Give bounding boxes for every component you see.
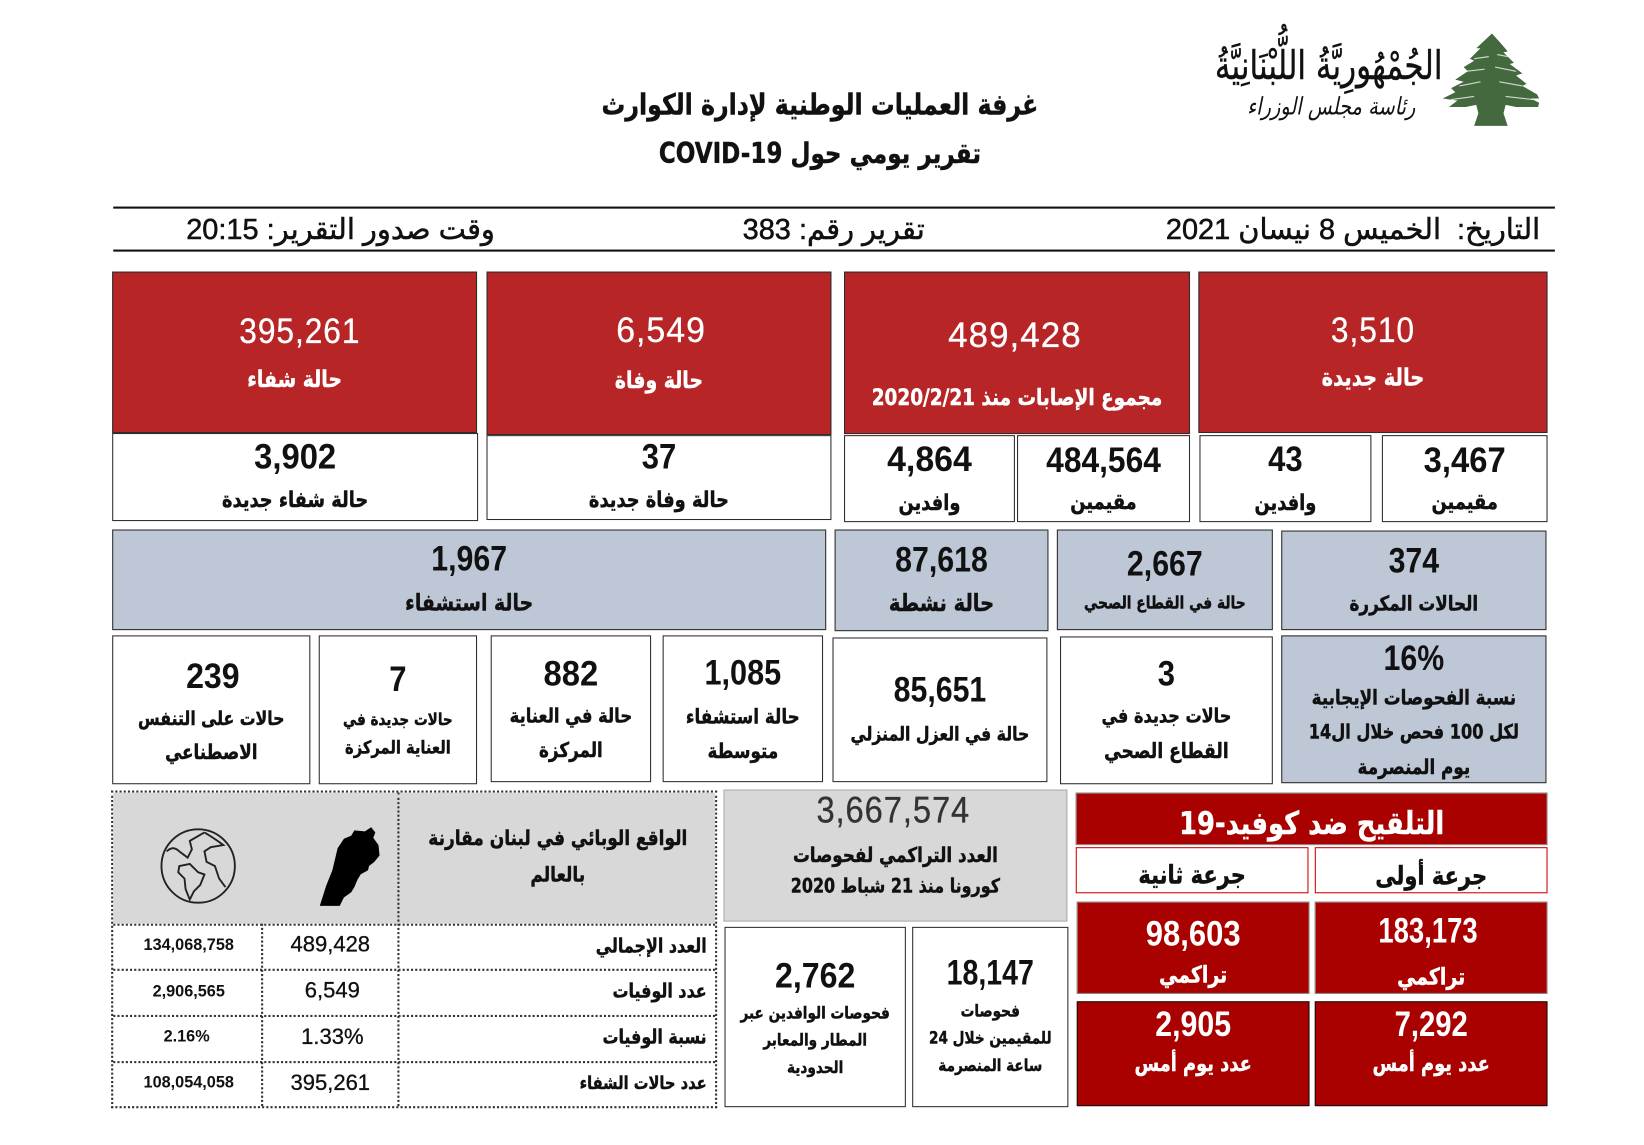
- label: عدد يوم أمس: [1134, 1052, 1252, 1077]
- panel: new ICU: [319, 635, 477, 784]
- label: حالة في القطاع الصحي: [1084, 594, 1246, 613]
- panel: recovered: [112, 272, 477, 433]
- panel: first dose yesterday: [1315, 1001, 1548, 1106]
- deaths label: حالة وفاة: [615, 368, 703, 394]
- report time: وقت صدور التقرير: 20:15: [186, 213, 495, 245]
- panel: comparison table: [111, 791, 717, 1108]
- label: وافدين: [1254, 491, 1316, 516]
- panel: arrivals tests: [724, 927, 906, 1107]
- number: 98,603: [1146, 914, 1241, 954]
- recovered number: 395,261: [239, 311, 360, 351]
- text: جرعة أولى: [1375, 860, 1487, 891]
- number: 85,651: [894, 670, 986, 710]
- panel: second dose header: [1076, 847, 1308, 893]
- label line 1: فحوصات: [961, 1002, 1020, 1021]
- label line 2: الاصطناعي: [165, 740, 257, 764]
- label: مقيمين: [1432, 490, 1498, 515]
- panel: moderate: [663, 635, 823, 782]
- title: operations room: غرفة العمليات الوطنية لإدارة الكوارث: [602, 89, 1038, 122]
- new cases number: 3,510: [1331, 310, 1415, 350]
- table label: recoveries: عدد حالات الشفاء: [580, 1074, 707, 1094]
- panel: hospitalised: [112, 529, 826, 630]
- panel: new residents: [1382, 435, 1548, 522]
- panel: new health sector: [1060, 636, 1273, 784]
- number: 183,173: [1378, 911, 1478, 951]
- panel: ICU: [491, 635, 651, 782]
- label line 3: يوم المنصرمة: [1358, 755, 1470, 779]
- label: تراكمي: [1397, 964, 1465, 991]
- panel: new recoveries: [112, 433, 478, 521]
- table value: world rate: 2.16%: [164, 1028, 210, 1046]
- number: 7,292: [1395, 1004, 1468, 1044]
- table value: Lebanon deaths: 6,549: [305, 979, 360, 1003]
- number: 87,618: [895, 540, 988, 580]
- number: 43: [1268, 439, 1303, 479]
- panel: new cases: [1198, 272, 1548, 433]
- number: 37: [642, 437, 676, 477]
- panel: ventilated: [112, 635, 310, 784]
- number: 2,905: [1155, 1004, 1231, 1044]
- icon: cedar tree: [1442, 34, 1540, 126]
- table label: total: العدد الإجمالي: [596, 934, 707, 958]
- panel: total arrivals: [844, 435, 1015, 522]
- label: حالة في العزل المنزلي: [851, 723, 1029, 746]
- panel: new deaths: [486, 435, 831, 520]
- panel: vaccination heading: [1076, 793, 1548, 845]
- number: 1,967: [431, 539, 507, 579]
- label: حالة استشفاء: [405, 590, 533, 617]
- label line 1: حالات جديدة في: [1101, 705, 1231, 728]
- label line 1: حالات على التنفس: [138, 707, 284, 730]
- table value: world recoveries: 108,054,058: [144, 1074, 234, 1092]
- icon: globe: [160, 828, 236, 904]
- logo text: republic name: الجُمْهُورِيَّةُ اللُّبْنَانِيَّةُ: [1215, 42, 1443, 88]
- table label: deaths: عدد الوفيات: [613, 980, 707, 1003]
- number: 239: [186, 656, 240, 696]
- number: 2,762: [775, 956, 855, 996]
- header rule bottom: [113, 250, 1555, 252]
- logo: Lebanese Republic, Presidency of the Council of Ministers: [1215, 24, 1540, 126]
- table value: Lebanon rate: 1.33%: [301, 1025, 364, 1049]
- table value: Lebanon total: 489,428: [290, 933, 370, 957]
- table value: world deaths: 2,906,565: [153, 983, 225, 1001]
- number: 16%: [1384, 639, 1444, 678]
- label line 2: المركزة: [539, 738, 603, 762]
- table heading line 2: بالعالم: [530, 863, 585, 887]
- panel: first dose cumulative: [1315, 902, 1548, 994]
- label line 2: العناية المركزة: [345, 738, 451, 759]
- panel: cumulative tests: [723, 789, 1067, 922]
- label: حالة وفاة جديدة: [589, 488, 729, 513]
- number: 374: [1389, 541, 1439, 581]
- label line 1: حالات جديدة في: [343, 711, 453, 730]
- header rule top: [113, 207, 1555, 209]
- label line 2: القطاع الصحي: [1104, 739, 1229, 763]
- number: 3: [1158, 654, 1175, 694]
- label line 2: لكل 100 فحص خلال ال14: [1309, 720, 1519, 743]
- panel: second dose cumulative: [1077, 902, 1310, 994]
- number: 3,667,574: [816, 790, 970, 831]
- panel: second dose yesterday: [1077, 1001, 1310, 1106]
- report date: التاريخ: الخميس 8 نيسان 2021: [1166, 213, 1540, 245]
- icon: Lebanon map: [320, 827, 380, 906]
- number: 3,902: [254, 437, 336, 477]
- label line 2: للمقيمين خلال 24: [929, 1029, 1052, 1049]
- table heading line 1: الواقع الوبائي في لبنان مقارنة: [428, 826, 687, 850]
- label line 1: حالة في العناية: [510, 705, 632, 728]
- number: 18,147: [947, 953, 1034, 993]
- number: 484,564: [1046, 440, 1161, 480]
- panel: health sector: [1057, 529, 1273, 630]
- label: مقيمين: [1070, 490, 1137, 515]
- label line 2: متوسطة: [707, 739, 778, 763]
- panel: deaths: [486, 272, 831, 435]
- total number: 489,428: [948, 316, 1082, 355]
- number: 4,864: [887, 439, 972, 479]
- number: 2,667: [1127, 544, 1203, 584]
- label line 2: المطار والمعابر: [763, 1032, 867, 1051]
- panel: first dose header: [1315, 847, 1548, 893]
- panel: home isolation: [832, 637, 1047, 782]
- panel: total residents: [1017, 435, 1190, 522]
- label: وافدين: [899, 491, 960, 516]
- panel: new arrivals: [1199, 435, 1371, 522]
- deaths number: 6,549: [616, 310, 706, 350]
- label: حالة شفاء جديدة: [222, 488, 368, 513]
- new cases label: حالة جديدة: [1322, 365, 1424, 392]
- table row: total: [144, 933, 707, 1095]
- label: حالة نشطة: [889, 591, 994, 617]
- table header background: [113, 793, 715, 924]
- panel: resident tests: [912, 927, 1068, 1107]
- number: 3,467: [1424, 440, 1506, 480]
- label line 1: نسبة الفحوصات الإيجابية: [1312, 685, 1516, 710]
- total label: مجموع الإصابات منذ 2020/2/21: [872, 386, 1162, 411]
- heading text: التلقيح ضد كوفيد-19: [1179, 805, 1444, 842]
- report number: تقرير رقم: 383: [743, 213, 925, 245]
- panel: active: [835, 529, 1048, 631]
- label: تراكمي: [1159, 962, 1227, 989]
- number: 1,085: [704, 653, 781, 693]
- number: 882: [544, 654, 598, 694]
- logo text: presidency: رئاسة مجلس الوزراء: [1247, 94, 1415, 121]
- table label: death rate: نسبة الوفيات: [602, 1026, 707, 1049]
- table value: world total: 134,068,758: [144, 937, 234, 954]
- label: عدد يوم أمس: [1372, 1052, 1490, 1077]
- panel: repeated cases: [1281, 531, 1546, 630]
- label: الحالات المكررة: [1350, 591, 1478, 615]
- panel: positivity: [1281, 635, 1546, 783]
- label line 1: فحوصات الوافدين عبر: [741, 1004, 890, 1023]
- panel: total cases: [844, 272, 1190, 434]
- text: جرعة ثانية: [1138, 859, 1246, 890]
- label line 1: العدد التراكمي لفحوصات: [793, 843, 998, 867]
- label line 1: حالة استشفاء: [686, 704, 800, 729]
- table value: Lebanon recoveries: 395,261: [290, 1071, 370, 1095]
- label line 2: كورونا منذ 21 شباط 2020: [791, 875, 1000, 898]
- label line 3: الحدودية: [787, 1059, 843, 1078]
- number: 7: [389, 659, 407, 699]
- label line 3: ساعة المنصرمة: [938, 1057, 1042, 1076]
- recovered label: حالة شفاء: [247, 367, 342, 393]
- subtitle: daily report: تقرير يومي حول COVID-19: [659, 139, 981, 171]
